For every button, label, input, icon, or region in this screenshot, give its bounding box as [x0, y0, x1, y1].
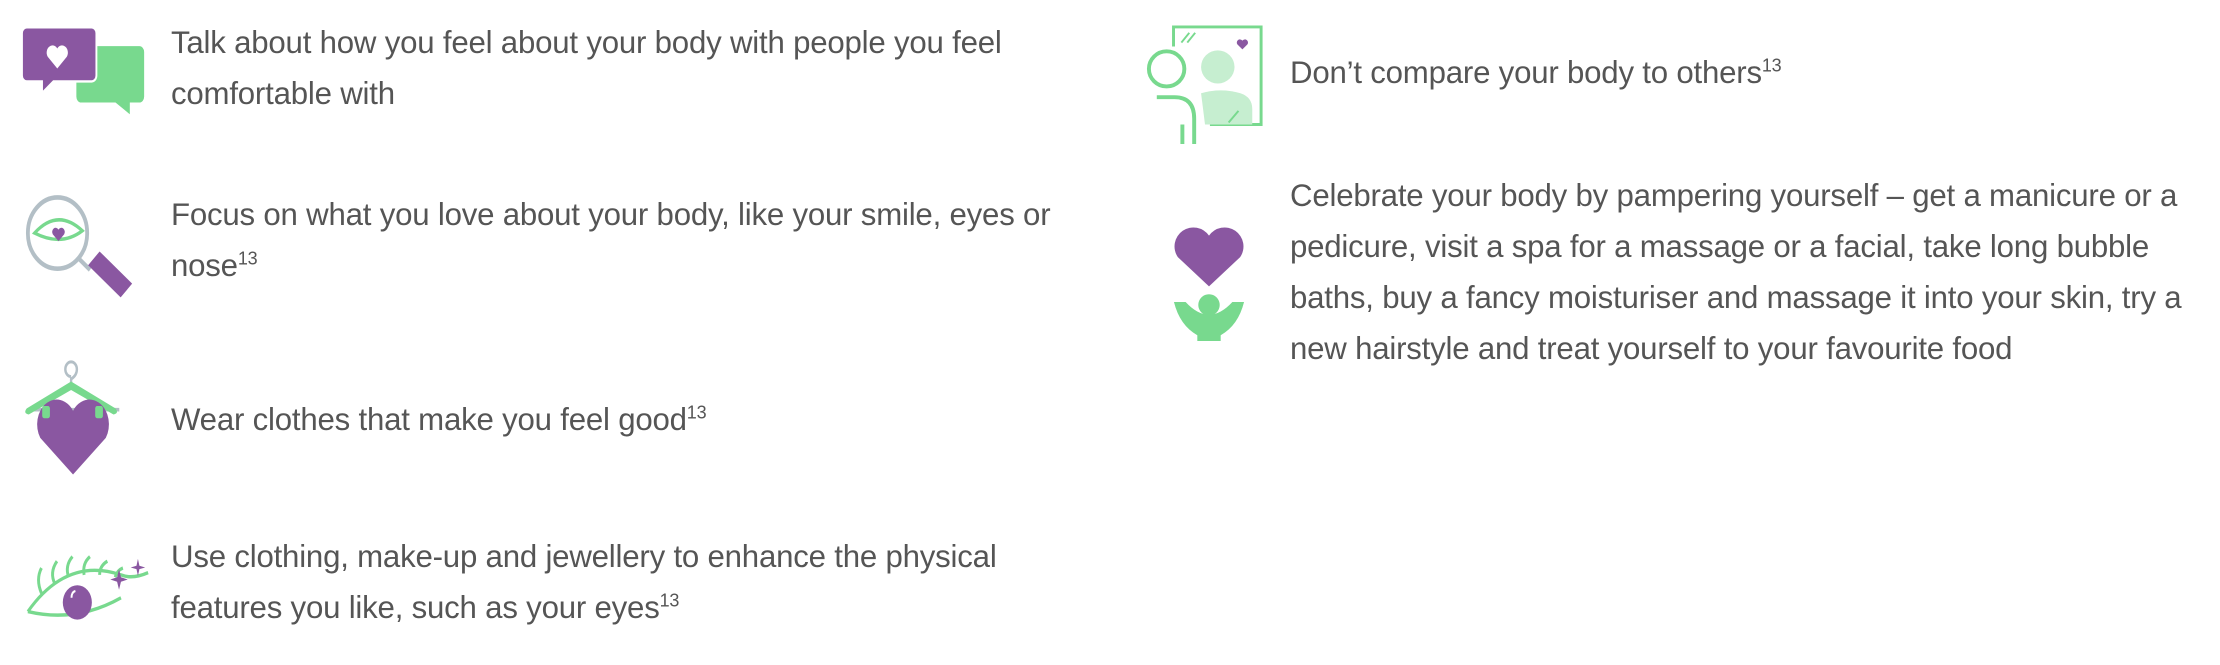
text: talk: comfortable with: [171, 76, 395, 111]
icon: eye with lashes: [26, 555, 149, 620]
icon: mirror: [1146, 26, 1263, 144]
icon: hanger heart: [25, 360, 120, 474]
text: wear: Wear clothes that make you feel good13: [171, 402, 706, 437]
icon: chat bubbles: [22, 28, 144, 114]
text: talk: [171, 25, 1002, 111]
text: celebrate: Celebrate your body by pampering yourself – get a manicure or a: [1290, 178, 2177, 213]
text: focus: nose13: [171, 248, 257, 283]
text: use clothing: features you like, such as your eyes13: [171, 590, 679, 625]
text: celebrate: baths, buy a fancy moisturiser and massage it into your skin, try a: [1290, 280, 2181, 315]
text: focus: Focus on what you love about your body, like your smile, eyes or: [171, 197, 1050, 232]
icon: magnifier eye: [26, 195, 132, 298]
text: use clothing: [171, 539, 997, 625]
text: celebrate: pedicure, visit a spa for a massage or a facial, take long bubble: [1290, 229, 2149, 264]
text: celebrate: new hairstyle and treat yourself to your favourite food: [1290, 331, 2012, 366]
text: talk: Talk about how you feel about your body with people you feel: [171, 25, 1002, 60]
text: use clothing: Use clothing, make-up and jewellery to enhance the physical: [171, 539, 997, 574]
icon: heart person: [1174, 228, 1244, 341]
text: compare: Don’t compare your body to others13: [1290, 55, 1781, 90]
text: celebrate: [1290, 178, 2182, 366]
text: focus: [171, 197, 1050, 283]
